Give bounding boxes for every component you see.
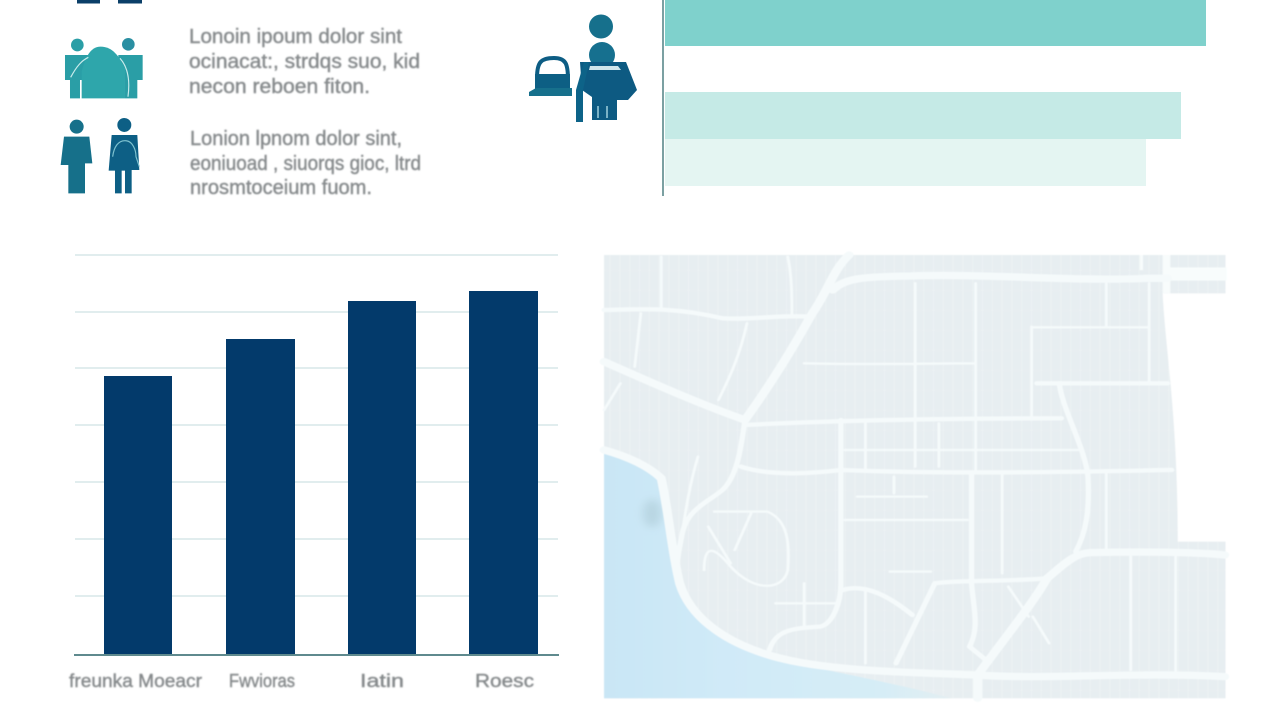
column chart — [74, 255, 559, 656]
text block: second description — [190, 128, 421, 199]
map — [604, 255, 1227, 698]
icon: person with bag at desk — [529, 14, 637, 122]
column chart labels: freunka Moeacr — [69, 671, 202, 691]
text block: first description: ocinacat:, strdqs suo, kid — [189, 51, 420, 73]
map: major roads — [604, 255, 1225, 698]
bar: fourth column — [469, 291, 538, 655]
text block: second description: nrosmtoceium fuom. — [190, 177, 372, 199]
icon: man and woman — [61, 118, 139, 193]
map: secondary roads — [604, 309, 1172, 663]
column chart labels: Roesc — [475, 671, 534, 691]
bar: third column — [348, 301, 416, 655]
text block: first description: Lonoin ipoum dolor sint — [189, 26, 402, 48]
bar: top — [665, 0, 1206, 46]
icon: group of people — [65, 38, 143, 98]
map: water — [604, 453, 951, 698]
horizontal bar chart — [662, 0, 1206, 196]
column chart labels — [69, 671, 534, 691]
bar: first column — [104, 376, 172, 655]
bar: second column — [226, 339, 295, 655]
column chart labels: Iatin — [360, 671, 404, 691]
bar: third — [665, 92, 1181, 139]
map: minor roads — [604, 257, 1176, 673]
bar: fourth — [665, 139, 1146, 186]
column chart labels: Fwvioras — [229, 671, 295, 691]
icon: cropped top people — [77, 0, 142, 4]
text block: first description: necon reboen fiton. — [189, 76, 370, 98]
text block: second description: eoniuoad , siuorqs gioc, ltrd — [190, 153, 421, 175]
text block: first description — [189, 26, 420, 98]
text block: second description: Lonion lpnom dolor sint, — [190, 128, 402, 150]
